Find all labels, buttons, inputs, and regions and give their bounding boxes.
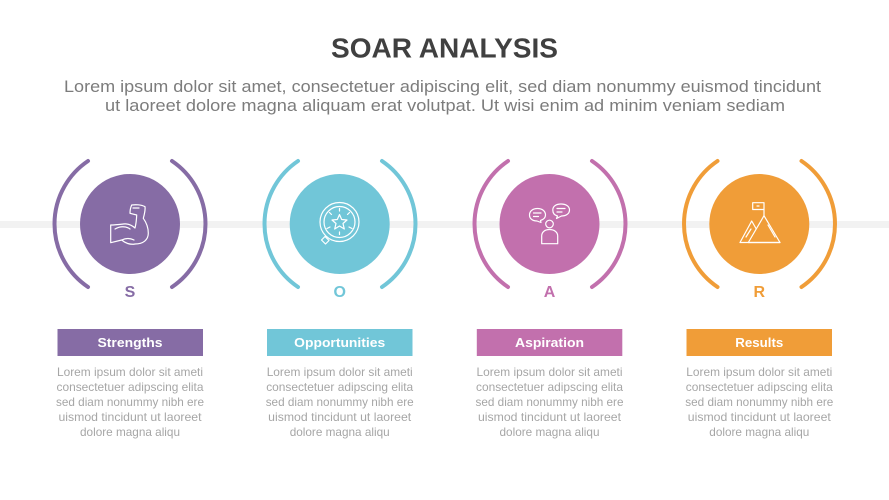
description text: dolore magna aliqu (290, 425, 390, 439)
letter S: S (125, 284, 136, 301)
panel: opportunities (265, 161, 415, 439)
label: Opportunities: Opportunities (294, 336, 385, 350)
description text: dolore magna aliqu (80, 425, 180, 439)
description text: Lorem ipsum dolor sit ameti (686, 365, 832, 379)
description text: sed diam nonummy nibh ere (685, 395, 834, 409)
description text: dolore magna aliqu (709, 425, 809, 439)
description text: consectetuer adipscing elita (686, 380, 833, 394)
description text: uismod tincidunt ut laoreet (478, 410, 622, 424)
icon: flexed arm (111, 205, 148, 244)
label: Results: Results (735, 336, 783, 350)
panel: strengths (55, 161, 205, 439)
description text (56, 365, 204, 439)
description text: consectetuer adipscing elita (56, 380, 204, 394)
circle with brackets: R (684, 161, 835, 287)
description text (266, 365, 414, 439)
description text: Lorem ipsum dolor sit ameti (267, 365, 413, 379)
letter O: O (333, 284, 346, 301)
label: Strengths: Strengths (98, 336, 163, 350)
subtitle text (64, 77, 821, 115)
description text: Lorem ipsum dolor sit ameti (57, 365, 203, 379)
icon: magnifier with star (320, 202, 359, 244)
description text: uismod tincidunt ut laoreet (58, 410, 202, 424)
letter A: A (544, 284, 556, 301)
description text: Lorem ipsum dolor sit ameti (476, 365, 622, 379)
title: SOAR ANALYSIS (331, 32, 558, 64)
description text: sed diam nonummy nibh ere (476, 395, 624, 409)
icon: person with speech bubbles (530, 204, 570, 244)
description text: sed diam nonummy nibh ere (56, 395, 204, 409)
circle with brackets: O (265, 161, 415, 287)
letter R: R (754, 284, 766, 301)
description text: dolore magna aliqu (500, 425, 600, 439)
icon: mountain with flag (740, 203, 780, 242)
description text (685, 365, 834, 439)
description text: sed diam nonummy nibh ere (266, 395, 414, 409)
panel: aspiration (475, 161, 625, 439)
description text: consectetuer adipscing elita (266, 380, 414, 394)
description text: consectetuer adipscing elita (476, 380, 623, 394)
circle with brackets: A (475, 161, 625, 287)
subtitle text: Lorem ipsum dolor sit amet, consectetuer adipiscing elit, sed diam nonummy euismod tincidunt (64, 77, 821, 96)
panel: results (684, 161, 835, 439)
label: Strengths (58, 329, 203, 356)
circle with brackets: S (55, 161, 205, 287)
label: Results (686, 329, 832, 356)
description text: uismod tincidunt ut laoreet (268, 410, 412, 424)
description text (476, 365, 624, 439)
label: Aspiration (477, 329, 622, 356)
label: Aspiration: Aspiration (515, 336, 584, 350)
label: Opportunities (267, 329, 412, 356)
description text: uismod tincidunt ut laoreet (688, 410, 831, 424)
subtitle text: ut laoreet dolore magna aliquam erat volutpat. Ut wisi enim ad minim veniam sediam (105, 96, 785, 115)
